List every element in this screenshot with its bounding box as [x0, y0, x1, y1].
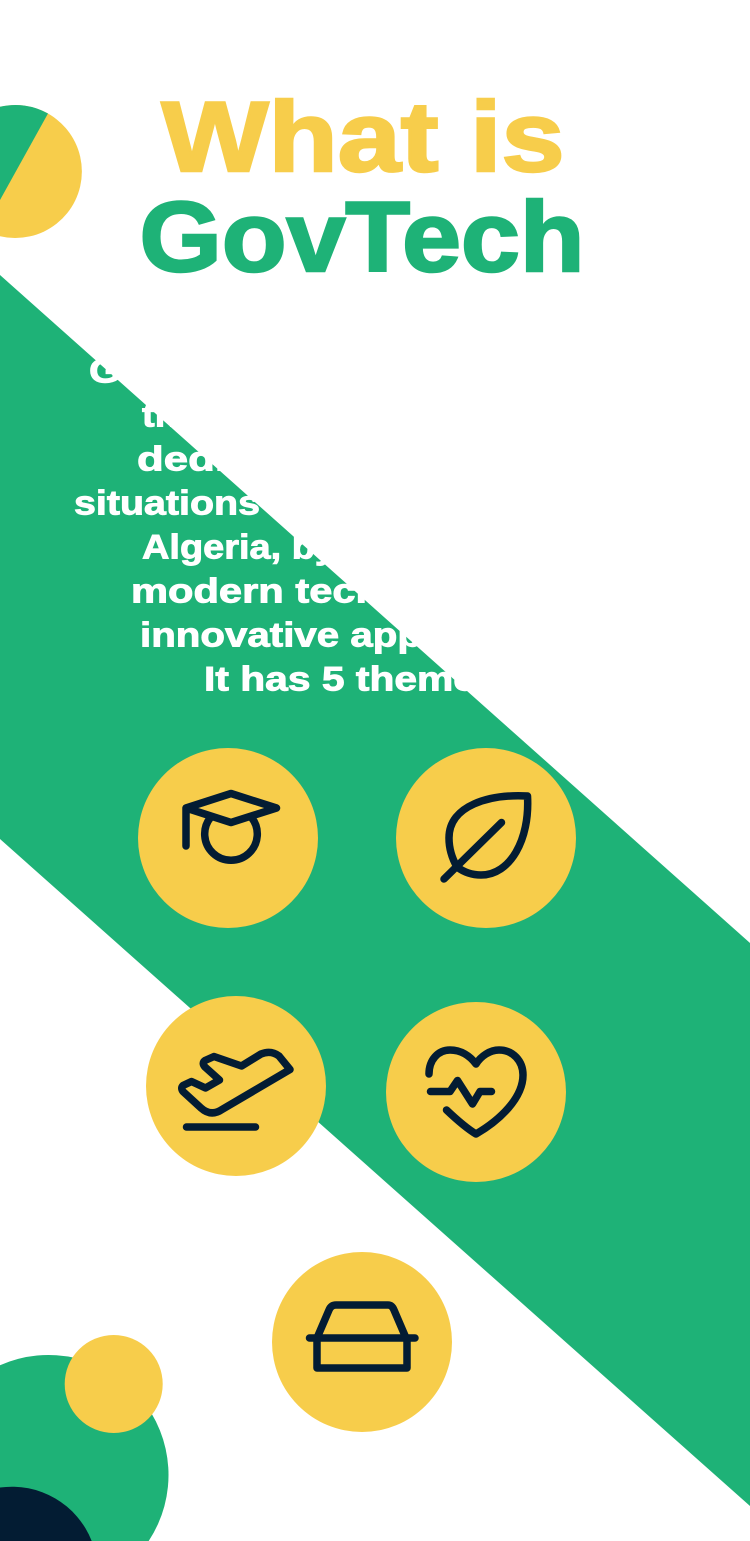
intro text block, white text clipped visually by the band edge: Algeria, by — [142, 528, 336, 566]
intro text block, white text clipped visually by the band edge: innovative app — [140, 616, 422, 654]
intro text block, white text clipped visually by the band edge: th — [142, 396, 178, 434]
title line: What is: What is — [162, 81, 564, 192]
theme icon: environment leaf — [396, 748, 576, 928]
theme icon: education — [138, 748, 318, 928]
intro text block, white text clipped visually by the band edge: situations — [74, 484, 260, 522]
title line: GovTech: GovTech — [140, 181, 584, 292]
intro text block, white text clipped visually by the band edge — [74, 352, 476, 698]
diagonal green band — [0, 275, 750, 1506]
intro text block, white text clipped visually by the band edge: G — [89, 352, 121, 390]
intro text block, white text clipped visually by the band edge: It has 5 theme — [204, 660, 476, 698]
theme icon: health heart — [386, 1002, 566, 1182]
decorative pie circle, top left — [0, 105, 82, 238]
decorative circles, bottom left — [0, 1335, 169, 1541]
theme icon: travel plane — [146, 996, 326, 1176]
intro text block, white text clipped visually by the band edge: dedi — [137, 440, 227, 478]
title — [140, 81, 584, 292]
theme icon: commerce box — [272, 1252, 452, 1432]
intro text block, white text clipped visually by the band edge: modern tech — [131, 572, 381, 610]
